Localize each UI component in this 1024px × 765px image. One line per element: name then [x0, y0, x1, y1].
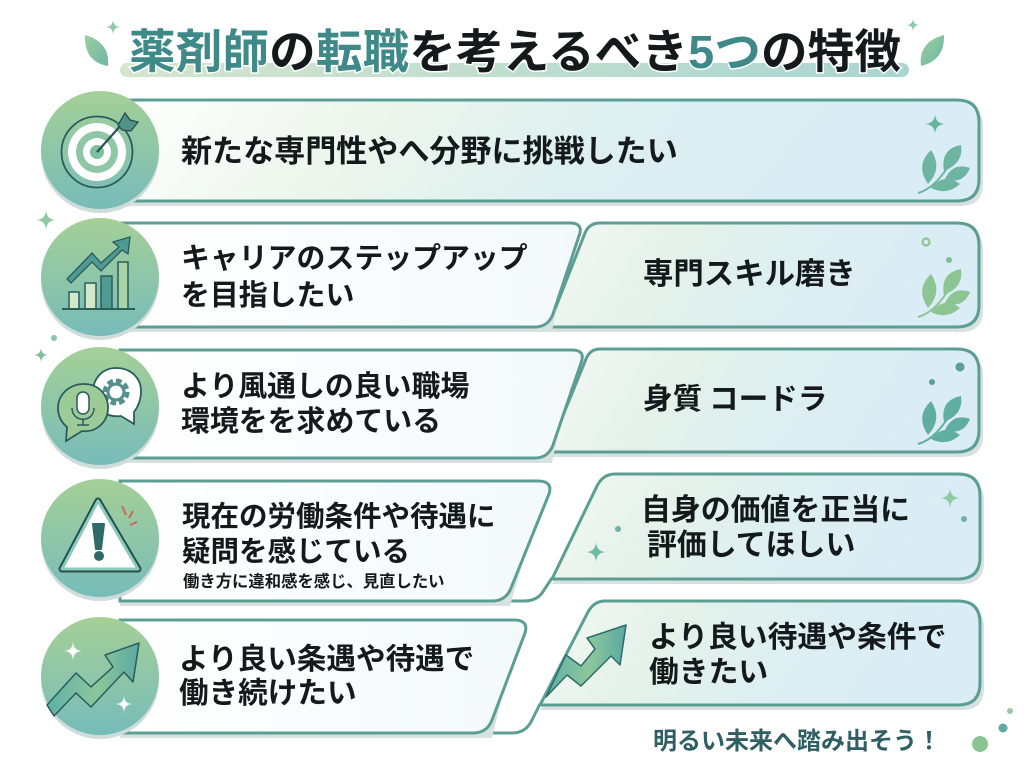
panel: row 2 left card	[120, 223, 580, 332]
panel: row 4 right card	[552, 474, 984, 584]
panel: row 3 left card	[120, 350, 582, 463]
icon: target	[41, 91, 159, 213]
footer dots	[972, 708, 1013, 752]
icon: rising arrow	[546, 625, 626, 697]
row 1 text: 新たな専門性やへ分野に挑戦したい	[181, 134, 678, 169]
right title leaf	[921, 35, 944, 66]
left title leaf	[85, 35, 108, 66]
sparkles	[939, 487, 961, 509]
icon: bar chart	[41, 218, 159, 340]
outer band	[480, 704, 540, 733]
panel: row 5 right card: 働きたい	[649, 656, 768, 689]
sprig	[918, 396, 970, 444]
panel: row 5 left card with outer band	[120, 620, 540, 738]
title sparkles	[105, 18, 920, 35]
title text: 薬剤師の転職を考えるべき5つの特徴	[129, 26, 901, 78]
title	[120, 26, 909, 78]
sparkle	[924, 113, 946, 135]
panel: row 1 card	[120, 100, 983, 206]
dots	[929, 362, 965, 385]
text: 現在の労働条件や待遇に	[182, 501, 496, 533]
left margin sparkle upper	[35, 209, 57, 231]
panel: row 4 right card: 評価してほしい	[647, 529, 855, 562]
panel: row 2 right card	[548, 223, 983, 332]
panel: row 4 left card with outer band	[120, 481, 552, 606]
sprig	[918, 145, 970, 193]
outer band	[500, 578, 552, 601]
left margin sparkle	[33, 347, 49, 363]
text: キャリアのステップアップ	[181, 243, 528, 275]
panel: row 5 right card	[540, 601, 984, 710]
dot	[946, 257, 952, 263]
sprig	[918, 269, 970, 317]
text: 専門スキル磨き	[643, 257, 856, 291]
dots	[615, 516, 967, 532]
icon: growth arrow	[41, 617, 159, 739]
panel: row 4 left card with outer band: 働き方に違和感を感じ、見直したい	[183, 572, 445, 591]
title underline	[120, 63, 909, 77]
panel: row 2 left card: を目指したい	[181, 280, 354, 312]
panel: row 5 left card with outer band: 働き続けたい	[179, 677, 357, 710]
left margin dot	[51, 335, 57, 341]
panel: row 3 right card	[548, 349, 983, 457]
text: 身質	[643, 383, 702, 416]
icon: speech bubbles	[41, 347, 159, 469]
ring	[922, 238, 930, 246]
panel: row 4 left card with outer band: 疑問を感じている	[182, 536, 410, 568]
text: コードラ	[709, 383, 827, 416]
text: 自身の価値を正当に	[641, 494, 910, 527]
text: より良い条遇や待遇で	[179, 643, 474, 676]
footer message: 明るい未来へ踏み出そう！	[653, 728, 941, 755]
text: より良い待遇や条件で	[649, 621, 946, 654]
text: より風通しの良い職場	[181, 371, 469, 403]
icon: warning triangle	[41, 479, 159, 601]
panel: row 3 left card: 環境をを求めている	[181, 406, 441, 438]
